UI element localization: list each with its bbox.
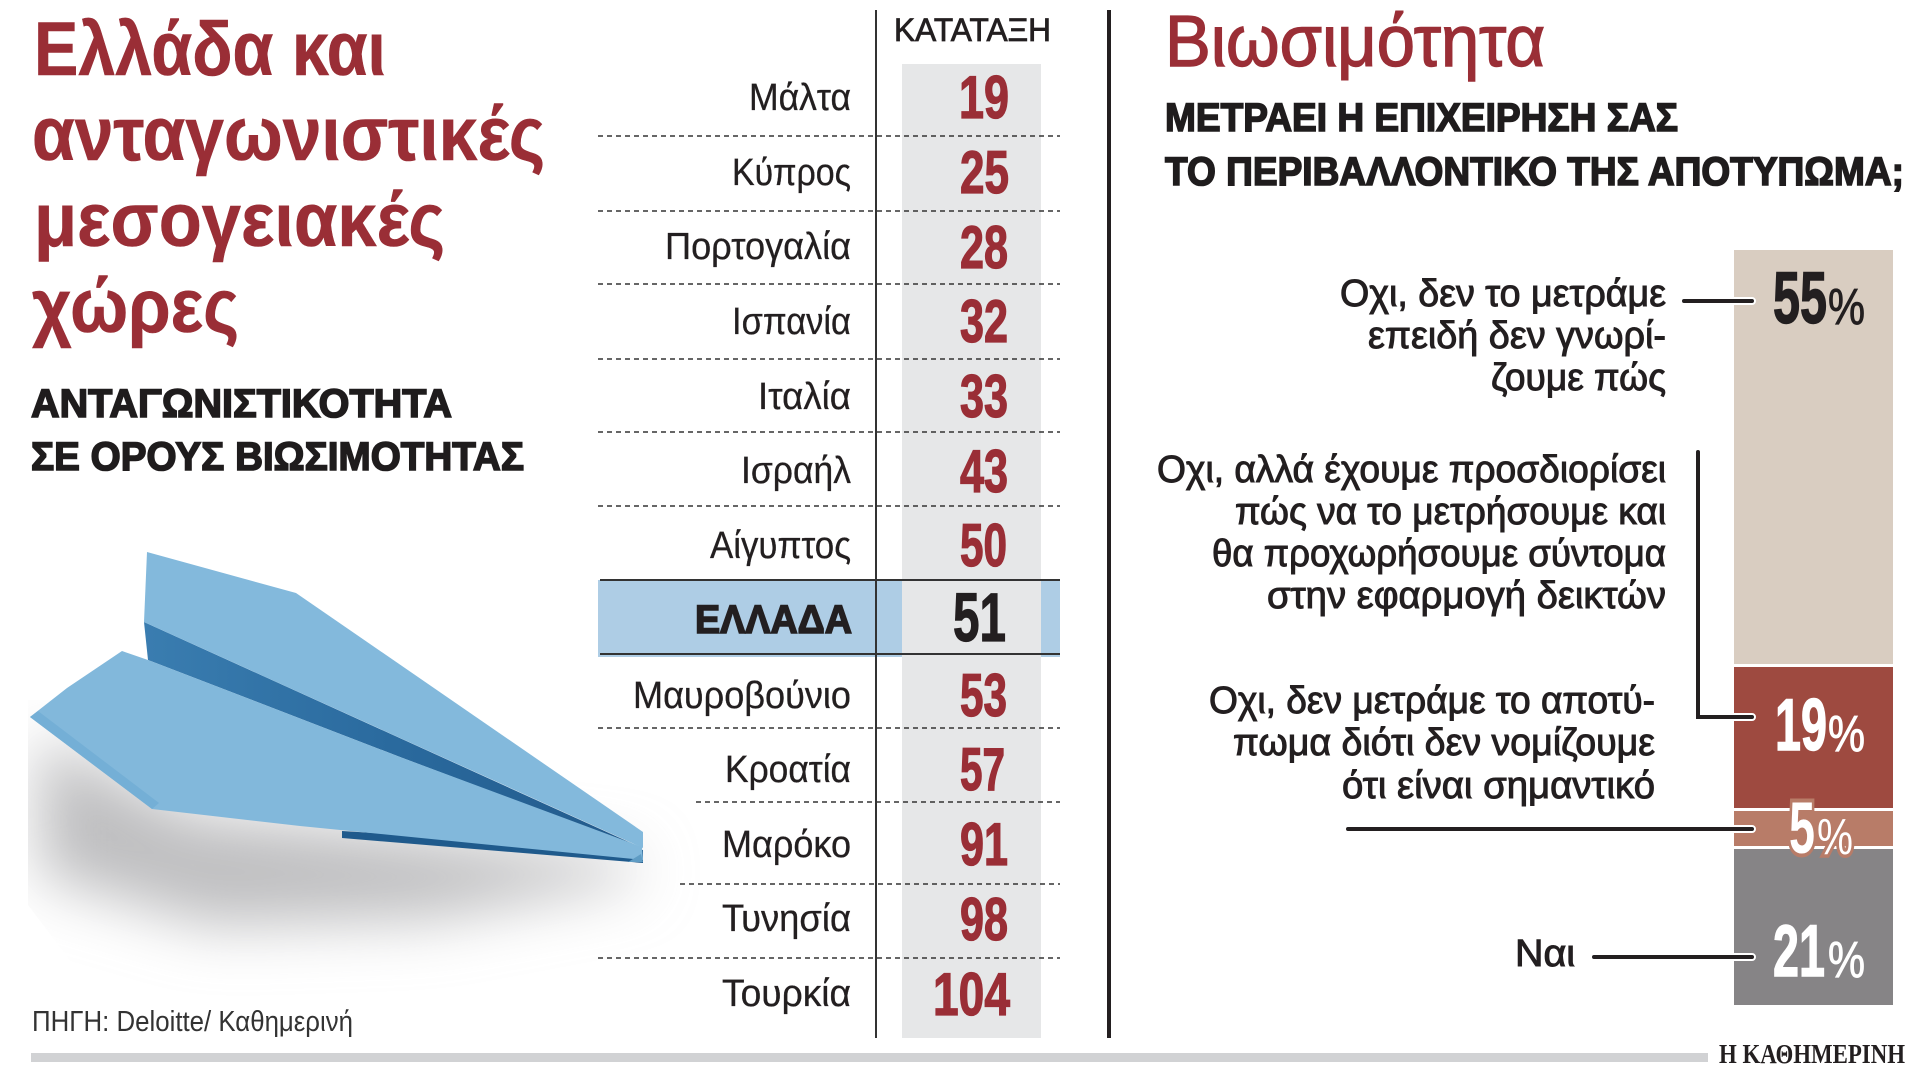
segment: 21% — [1734, 849, 1893, 1005]
country names: Ιταλία — [758, 376, 851, 418]
rank numbers: 28 — [960, 214, 1008, 281]
panel divider — [1107, 10, 1111, 1038]
rank numbers: 98 — [960, 886, 1008, 953]
heading: sustainability: Βιωσιμότητα — [1165, 2, 1545, 82]
country names: Κροατία — [725, 749, 851, 791]
label: no, not important — [1209, 680, 1655, 807]
subtitle: left: ΑΝΤΑΓΩΝΙΣΤΙΚΟΤΗΤΑ — [31, 382, 452, 426]
label: no, don't know how: ζουμε πώς — [1491, 357, 1666, 399]
value: 21%: % — [1828, 931, 1865, 988]
label: no, but have determined how — [1157, 449, 1666, 617]
title: ανταγωνιστικές — [32, 92, 545, 177]
highlight row: Greece: ΕΛΛΑΔΑ — [695, 598, 852, 642]
segment: 5% — [1734, 811, 1893, 846]
country names: Μαρόκο — [722, 824, 851, 866]
country names: Αίγυπτος — [710, 525, 851, 567]
label: no, but have determined how: Οχι, αλλά έχουμε προσδιορίσει — [1157, 449, 1666, 491]
country names — [633, 77, 851, 1015]
stacked bar chart — [1734, 250, 1893, 1005]
footer bar — [31, 1053, 1708, 1062]
title: χώρες — [32, 264, 239, 349]
rank numbers — [933, 64, 1010, 1028]
rank numbers: 91 — [960, 811, 1008, 878]
label: no, not important: ότι είναι σημαντικό — [1342, 765, 1655, 807]
title — [32, 7, 545, 349]
ranking table — [598, 10, 1060, 1038]
country names: Ισπανία — [732, 301, 851, 343]
highlight row: Greece: 51 — [953, 579, 1006, 656]
value: 19%: % — [1828, 705, 1865, 762]
title: Ελλάδα και — [34, 7, 386, 92]
rank numbers: 25 — [960, 139, 1009, 206]
rank numbers: 43 — [960, 438, 1008, 505]
leader lines — [1348, 301, 1752, 957]
column header: ΚΑΤΑΤΑΞΗ — [894, 12, 1051, 48]
rank numbers: 53 — [960, 662, 1007, 729]
subtitle: left: ΣΕ ΟΡΟΥΣ ΒΙΩΣΙΜΟΤΗΤΑΣ — [31, 435, 524, 479]
label: no, don't know how: Οχι, δεν το μετράμε — [1340, 273, 1666, 315]
rank numbers: 57 — [960, 736, 1005, 803]
label: no, not important: Οχι, δεν μετράμε το αποτύ- — [1209, 680, 1655, 722]
rank numbers: 50 — [960, 512, 1007, 579]
value: 55%: 55 — [1773, 258, 1827, 339]
value: 55%: % — [1828, 278, 1865, 335]
value: 19%: 19 — [1775, 685, 1827, 766]
rank column background — [902, 64, 1041, 1038]
icon: paper plane with shadow — [30, 552, 643, 925]
label: yes: Ναι — [1515, 933, 1575, 975]
country names: Τουρκία — [722, 973, 851, 1015]
country names: Μάλτα — [749, 77, 851, 119]
question — [1165, 96, 1904, 194]
label: no, but have determined how: στην εφαρμογή δεικτών — [1267, 575, 1666, 617]
rank numbers: 104 — [933, 961, 1010, 1028]
title: μεσογειακές — [34, 178, 445, 263]
highlight row: Greece — [598, 579, 1060, 657]
rank numbers: 33 — [960, 363, 1008, 430]
value: 21%: 21 — [1773, 911, 1825, 992]
country names: Μαυροβούνιο — [633, 675, 851, 717]
subtitle: left — [31, 382, 524, 479]
value: 5%: 5 — [1789, 788, 1815, 869]
source: ΠΗΓΗ: Deloitte/ Καθημερινή — [32, 1006, 353, 1038]
label: no, don't know how — [1340, 273, 1666, 399]
label: no, not important: πωμα διότι δεν νομίζουμε — [1233, 722, 1655, 764]
country names: Πορτογαλία — [665, 226, 851, 268]
label: no, but have determined how: πώς να το μετρήσουμε και — [1235, 491, 1666, 533]
label: no, but have determined how: θα προχωρήσουμε σύντομα — [1212, 533, 1666, 575]
segment: 19% — [1734, 667, 1893, 808]
country names: Τυνησία — [722, 898, 851, 940]
rank numbers: 32 — [960, 288, 1008, 355]
value: 5%: % — [1817, 808, 1853, 865]
country names: Κύπρος — [732, 152, 851, 194]
rank numbers: 19 — [959, 64, 1009, 131]
question: ΜΕΤΡΑΕΙ Η ΕΠΙΧΕΙΡΗΣΗ ΣΑΣ — [1165, 96, 1678, 140]
label: no, don't know how: επειδή δεν γνωρί- — [1368, 315, 1666, 357]
value: 5% — [1789, 788, 1853, 869]
country names: Ισραήλ — [741, 450, 851, 492]
segment: 55% — [1734, 250, 1893, 664]
